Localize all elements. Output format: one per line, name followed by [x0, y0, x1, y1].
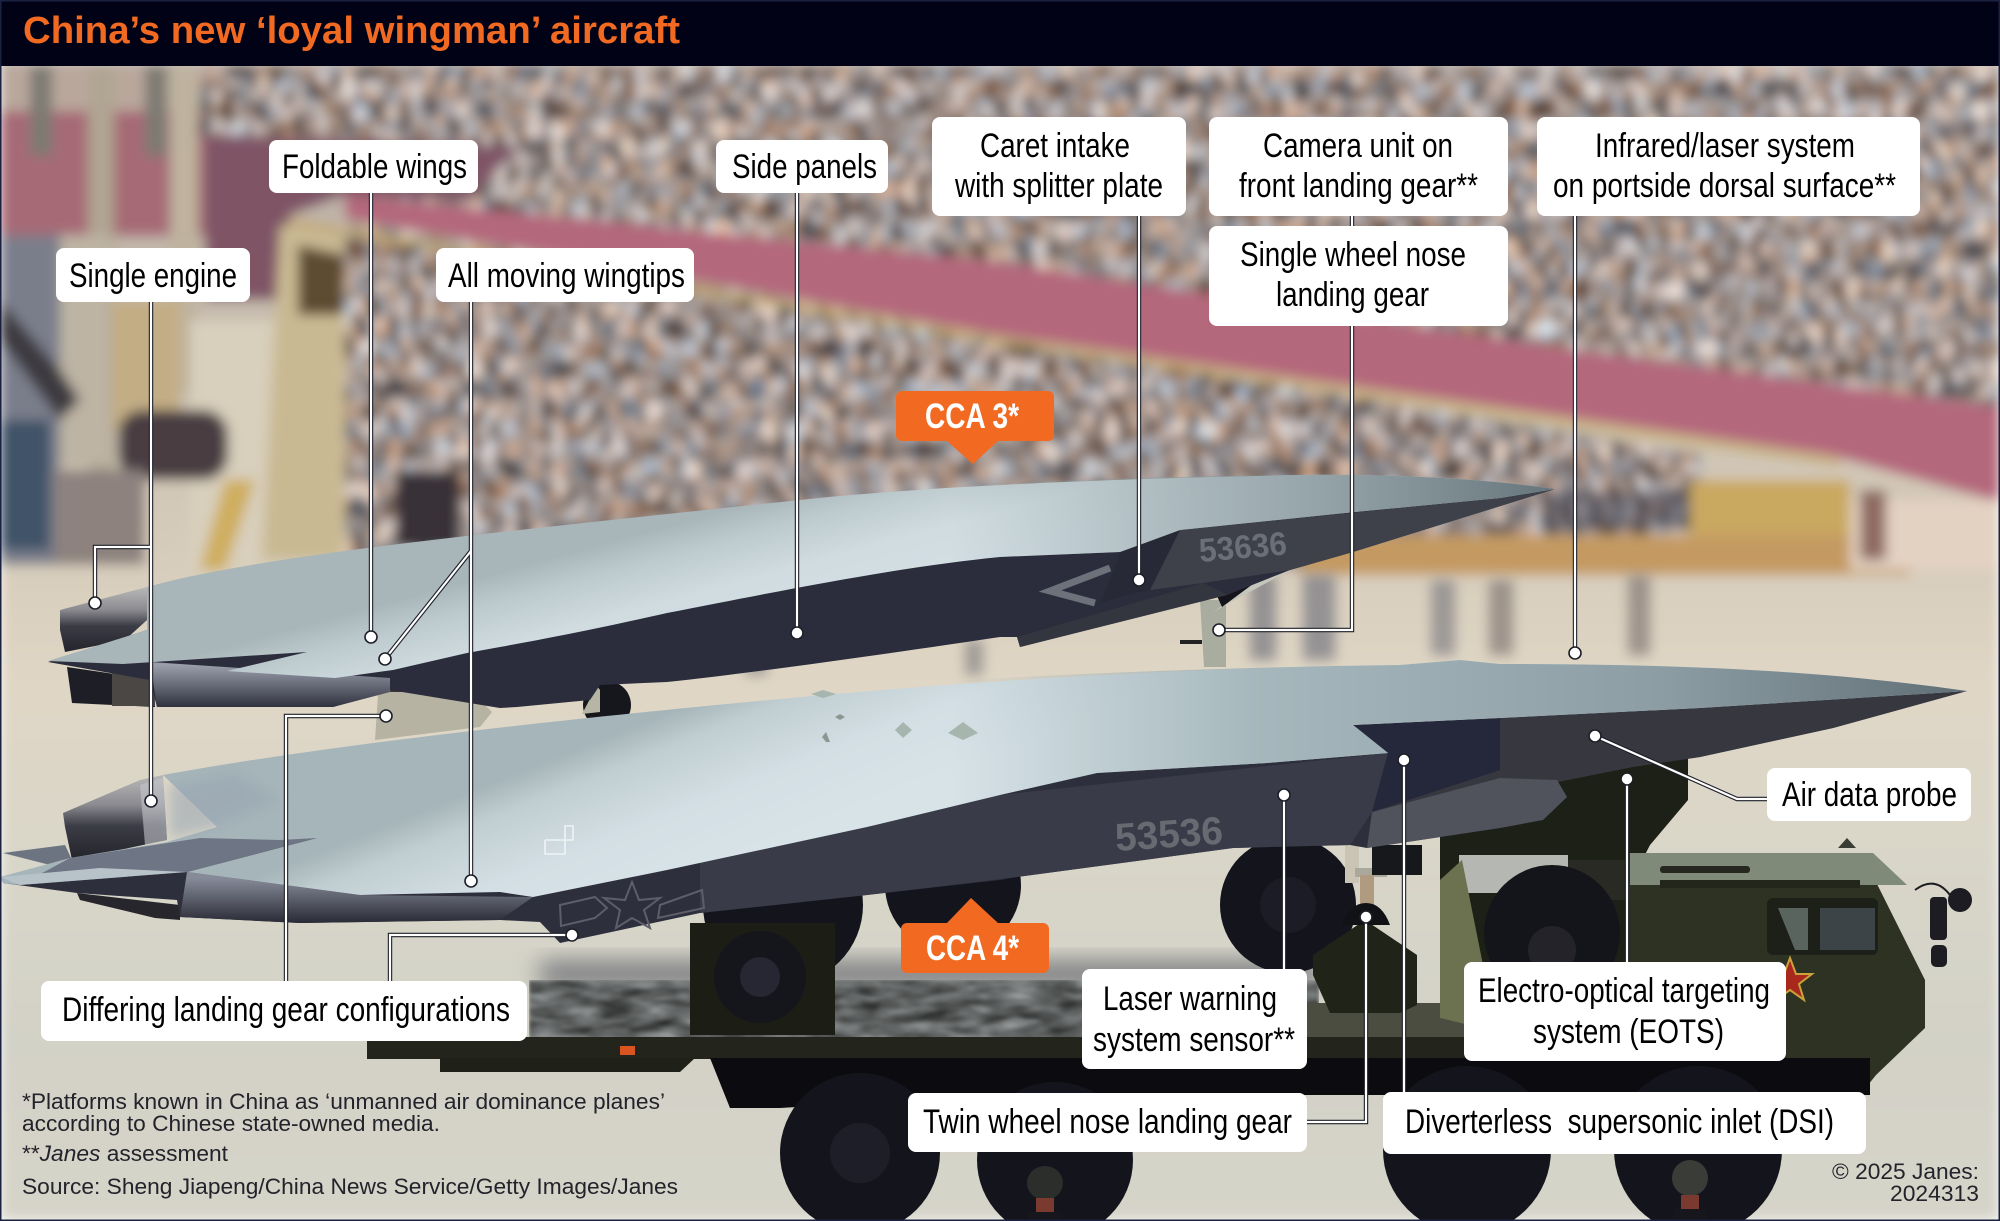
road wheels	[780, 1066, 1782, 1221]
callout: camera unit: front landing gear**	[1239, 167, 1478, 205]
tail number 53636: 53636	[1197, 524, 1288, 569]
leader: EOTS	[1621, 773, 1633, 965]
bed mount with spare wheel	[690, 923, 835, 1035]
callout: caret intake: Caret intake	[980, 127, 1130, 165]
underside CCA 3	[48, 489, 1555, 708]
main landing gear CCA 3	[375, 652, 631, 740]
tail number 53536: 53536	[1114, 810, 1224, 860]
callout: all moving wingtips: All moving wingtips	[448, 257, 685, 295]
callout: single engine: Single engine	[69, 257, 237, 295]
nose gear CCA 4	[1342, 843, 1422, 925]
callout: air data probe	[1767, 768, 1971, 821]
callout: EOTS: Electro-optical targeting	[1478, 972, 1770, 1010]
nose gear CCA 3	[1180, 570, 1290, 667]
callout: EOTS: system (EOTS)	[1533, 1013, 1724, 1051]
transporter truck	[367, 755, 1972, 1221]
nose gear cradle	[1313, 920, 1417, 1013]
tag: CCA 3: CCA 3*	[925, 397, 1019, 436]
ground shadow band under aircraft	[540, 962, 1320, 986]
callout: single engine	[56, 248, 250, 302]
footnotes and source: according to Chinese state-owned media.	[22, 1111, 440, 1136]
leader: single engine	[89, 302, 157, 807]
national insignia star and bars	[560, 882, 704, 928]
underside CCA 4	[3, 691, 1967, 943]
title bar	[0, 0, 2000, 66]
roundel on wing	[545, 826, 573, 854]
callout: laser warning: Laser warning	[1103, 980, 1277, 1018]
leader: camera unit and single wheel nose gear	[1213, 216, 1352, 636]
tarpaulin load on deck	[529, 980, 1470, 1040]
callout: infrared laser system: on portside dorsal surface**	[1553, 167, 1896, 205]
callout: differing landing gear	[41, 981, 527, 1041]
leader: air data probe	[1589, 730, 1770, 799]
callout: twin wheel nose gear: Twin wheel nose landing gear	[923, 1103, 1292, 1141]
title: China’s new ‘loyal wingman’ aircraft	[23, 10, 680, 52]
tag: CCA 3	[896, 391, 1054, 464]
truck hull behind nose	[1440, 755, 1688, 1060]
footnotes and source	[22, 1089, 678, 1199]
leader: side panels	[791, 193, 803, 639]
callout: side panels: Side panels	[732, 148, 877, 186]
flatbed deck	[367, 1037, 1870, 1108]
callout: laser warning	[1082, 969, 1307, 1069]
leader: caret intake	[1133, 216, 1145, 586]
callout: camera unit: Camera unit on	[1263, 127, 1453, 165]
callout: camera unit	[1209, 117, 1508, 216]
leader: DSI	[1398, 754, 1410, 1095]
callout: side panels	[716, 140, 888, 193]
callout: twin wheel nose gear	[908, 1093, 1307, 1152]
tag: CCA 4: CCA 4*	[926, 929, 1019, 968]
rear wheels behind aircraft	[703, 817, 1356, 985]
callout: single wheel nose gear: Single wheel nose	[1240, 236, 1466, 274]
truck cab	[1628, 838, 1972, 1095]
leader: laser warning	[1278, 789, 1290, 972]
chevron marking	[1050, 568, 1110, 603]
copyright: © 2025 Janes:	[1832, 1159, 1979, 1184]
copyright	[1832, 1159, 1979, 1206]
leaders: differing landing gear	[286, 710, 578, 985]
blurred spectators on ground	[745, 575, 1650, 675]
aircraft: CCA 4	[0, 660, 1967, 943]
callout: all moving wingtips	[436, 248, 694, 302]
leader: foldable wings	[365, 193, 377, 643]
footnotes and source: *Platforms known in China as ‘unmanned air dominance planes’	[22, 1089, 665, 1114]
equipment panel	[1440, 855, 1628, 1030]
callout: DSI: Diverterless supersonic inlet (DSI)	[1405, 1103, 1834, 1141]
callout: DSI	[1383, 1092, 1866, 1154]
callout: single wheel nose gear	[1209, 226, 1508, 326]
callout: foldable wings	[269, 140, 478, 193]
callout: caret intake: with splitter plate	[954, 167, 1163, 205]
footnotes and source: **Janes assessment	[22, 1141, 228, 1166]
callout: EOTS	[1464, 962, 1786, 1061]
callout: single wheel nose gear: landing gear	[1276, 276, 1429, 314]
copyright: 2024313	[1890, 1181, 1979, 1206]
callout: differing landing gear: Differing landing gear configurations	[62, 991, 510, 1029]
lit upper surface CCA 4	[0, 660, 1967, 897]
surface markings	[811, 690, 978, 742]
exhaust nozzle CCA 4	[3, 775, 180, 920]
leader: twin wheel nose gear	[1305, 911, 1372, 1122]
callout: laser warning: system sensor**	[1093, 1021, 1295, 1059]
tag: CCA 4	[901, 898, 1049, 973]
soldiers in foreground	[1027, 1160, 1708, 1220]
leader: infrared laser system	[1569, 216, 1581, 659]
leader: all moving wingtips	[379, 302, 477, 887]
lit upper surface CCA 3	[48, 475, 1555, 678]
aircraft: CCA 3	[48, 475, 1555, 740]
callout: infrared laser system	[1537, 117, 1920, 216]
callout: air data probe: Air data probe	[1782, 776, 1957, 814]
footnotes and source: Source: Sheng Jiapeng/China News Service/Getty Images/Janes	[22, 1174, 678, 1199]
callout: caret intake	[932, 117, 1186, 216]
callout: infrared laser system: Infrared/laser system	[1595, 127, 1855, 165]
callout: foldable wings: Foldable wings	[282, 148, 467, 186]
exhaust nozzles CCA 3	[60, 587, 155, 707]
